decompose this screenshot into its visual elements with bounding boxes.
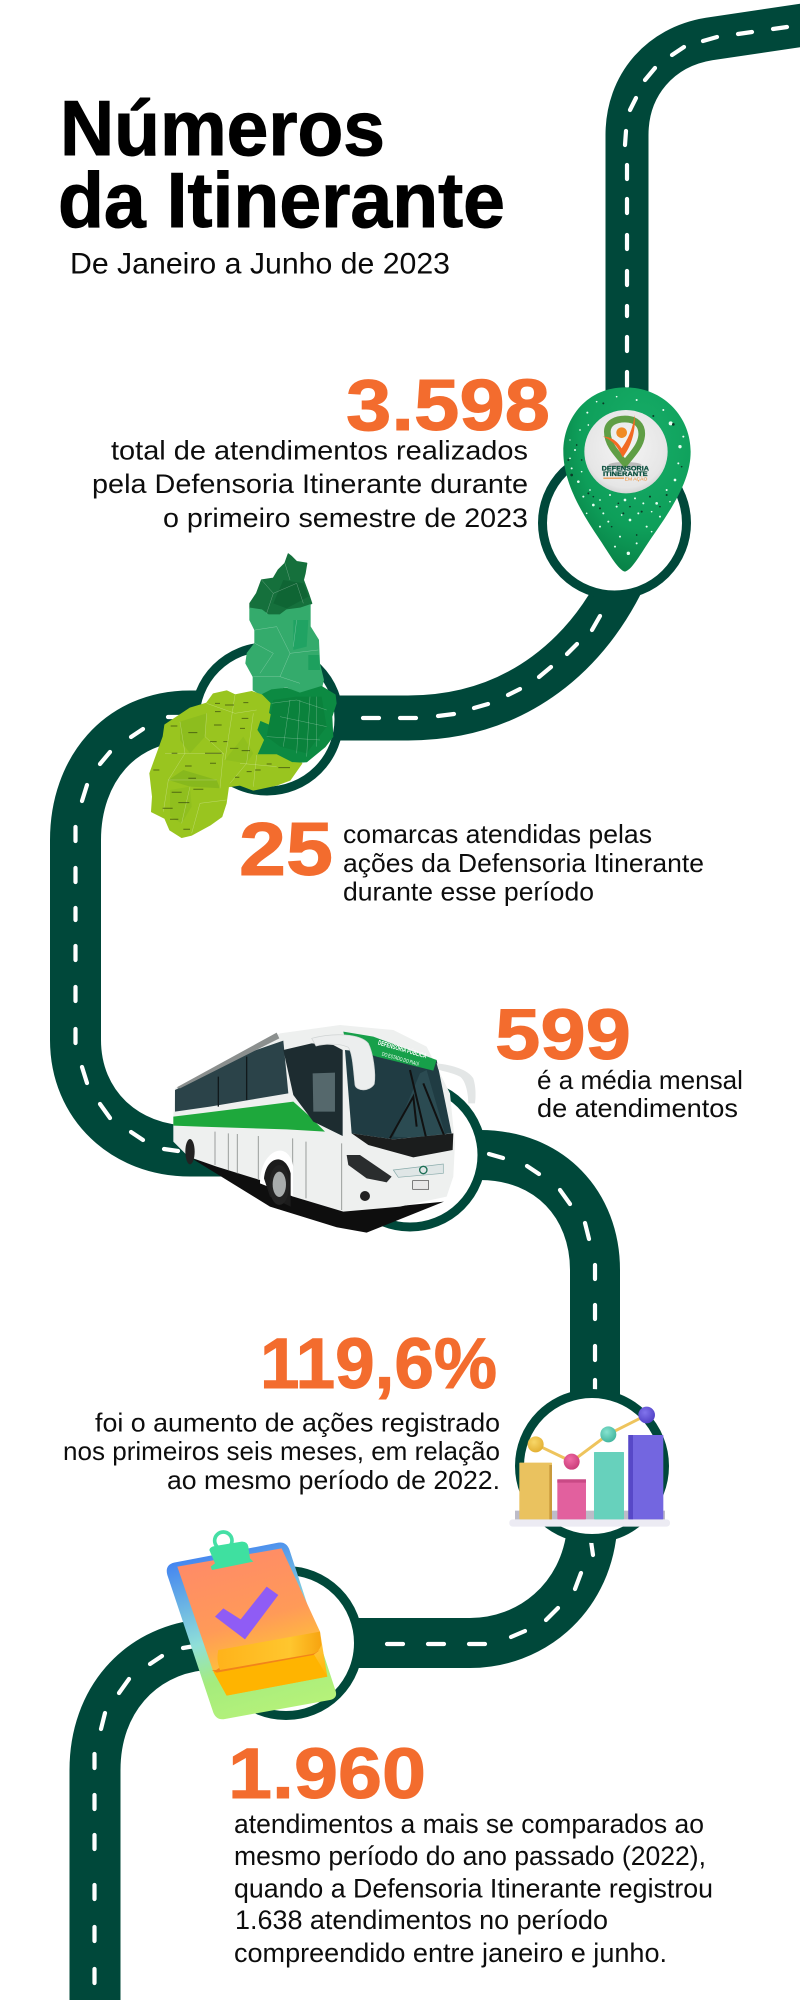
title: da Itinerante xyxy=(58,156,505,244)
map of Piauí xyxy=(150,554,336,837)
icon: 3D bar chart xyxy=(509,1407,670,1527)
bus windshield xyxy=(345,1050,452,1139)
bus luggage panel seams xyxy=(215,1132,342,1210)
stat: 3.598 xyxy=(92,366,550,533)
stat: 1.960: quando a Defensoria Itinerante registrou xyxy=(234,1874,713,1904)
title: Números xyxy=(60,84,385,172)
icon: location pin with logo xyxy=(563,387,691,572)
bus mirrors xyxy=(312,1035,375,1090)
stat: 119,6%: 119,6% xyxy=(260,1325,497,1404)
stat: 119,6%: foi o aumento de ações registrado xyxy=(95,1408,500,1438)
icon: location pin with logo: ITINERANTE xyxy=(603,471,648,478)
bus green stripe xyxy=(173,1102,325,1132)
stat: 599: é a média mensal xyxy=(537,1065,743,1095)
stat: 1.960: 1.960 xyxy=(228,1735,426,1814)
stat: 25 comarcas: ações da Defensoria Itinerante xyxy=(343,848,704,878)
stat: 3.598: o primeiro semestre de 2023 xyxy=(163,503,528,533)
stat: 25 comarcas: durante esse período xyxy=(343,876,594,906)
map shading patches xyxy=(168,580,327,823)
map region: south-west xyxy=(150,691,302,837)
map region: centre-south xyxy=(257,687,336,763)
stat: 1.960: compreendido entre janeiro e junho. xyxy=(234,1938,667,1968)
stat: 1.960: atendimentos a mais se comparados ao xyxy=(234,1809,704,1839)
stat: 25 comarcas xyxy=(239,807,704,906)
bus side windows xyxy=(175,1041,288,1112)
stat: 119,6%: nos primeiros seis meses, em relação xyxy=(63,1436,500,1466)
bus destination header: DEFENSORIA PÚBLICA xyxy=(377,1038,428,1060)
stat: 119,6% xyxy=(63,1325,500,1495)
bus destination header: DO ESTADO DO PIAUÍ xyxy=(381,1051,420,1068)
icon: location pin with logo: EM AÇÃO xyxy=(625,475,647,482)
title xyxy=(58,84,505,244)
stat: 3.598: pela Defensoria Itinerante durante xyxy=(92,469,528,499)
stat: 25 comarcas: comarcas atendidas pelas xyxy=(343,819,652,849)
stat: 3.598: total de atendimentos realizados xyxy=(111,436,528,466)
stat: 599: de atendimentos xyxy=(537,1093,738,1123)
bus headlight xyxy=(347,1155,392,1182)
map region: centre-north xyxy=(246,605,323,695)
map boundaries xyxy=(163,563,327,833)
stat: 599 xyxy=(495,996,743,1123)
bus door xyxy=(283,1043,343,1136)
stop rings xyxy=(195,451,686,1716)
stat: 1.960: mesmo período do ano passado (2022), xyxy=(234,1841,706,1871)
stat: 3.598: 3.598 xyxy=(346,366,550,446)
stat: 1.960 xyxy=(228,1735,713,1968)
stat: 1.960: 1.638 atendimentos no período xyxy=(235,1905,608,1935)
stat: 119,6%: ao mesmo período de 2022. xyxy=(167,1465,500,1495)
bus destination header xyxy=(343,1032,437,1071)
icon: clipboard with check xyxy=(167,1532,336,1719)
bus roof rack xyxy=(177,1033,279,1088)
subtitle: De Janeiro a Junho de 2023 xyxy=(70,248,450,280)
map place-name marks xyxy=(153,703,290,829)
bus body xyxy=(173,1025,455,1212)
bus front dark band xyxy=(352,1133,453,1157)
bus wheels xyxy=(185,1139,293,1207)
bus photo xyxy=(173,1025,476,1233)
stat: 25 comarcas: 25 xyxy=(239,807,333,891)
icon: location pin with logo: DEFENSORIA xyxy=(602,465,649,472)
bus shadow xyxy=(192,1158,444,1233)
stat: 599: 599 xyxy=(495,996,631,1075)
map region: north xyxy=(250,554,312,615)
